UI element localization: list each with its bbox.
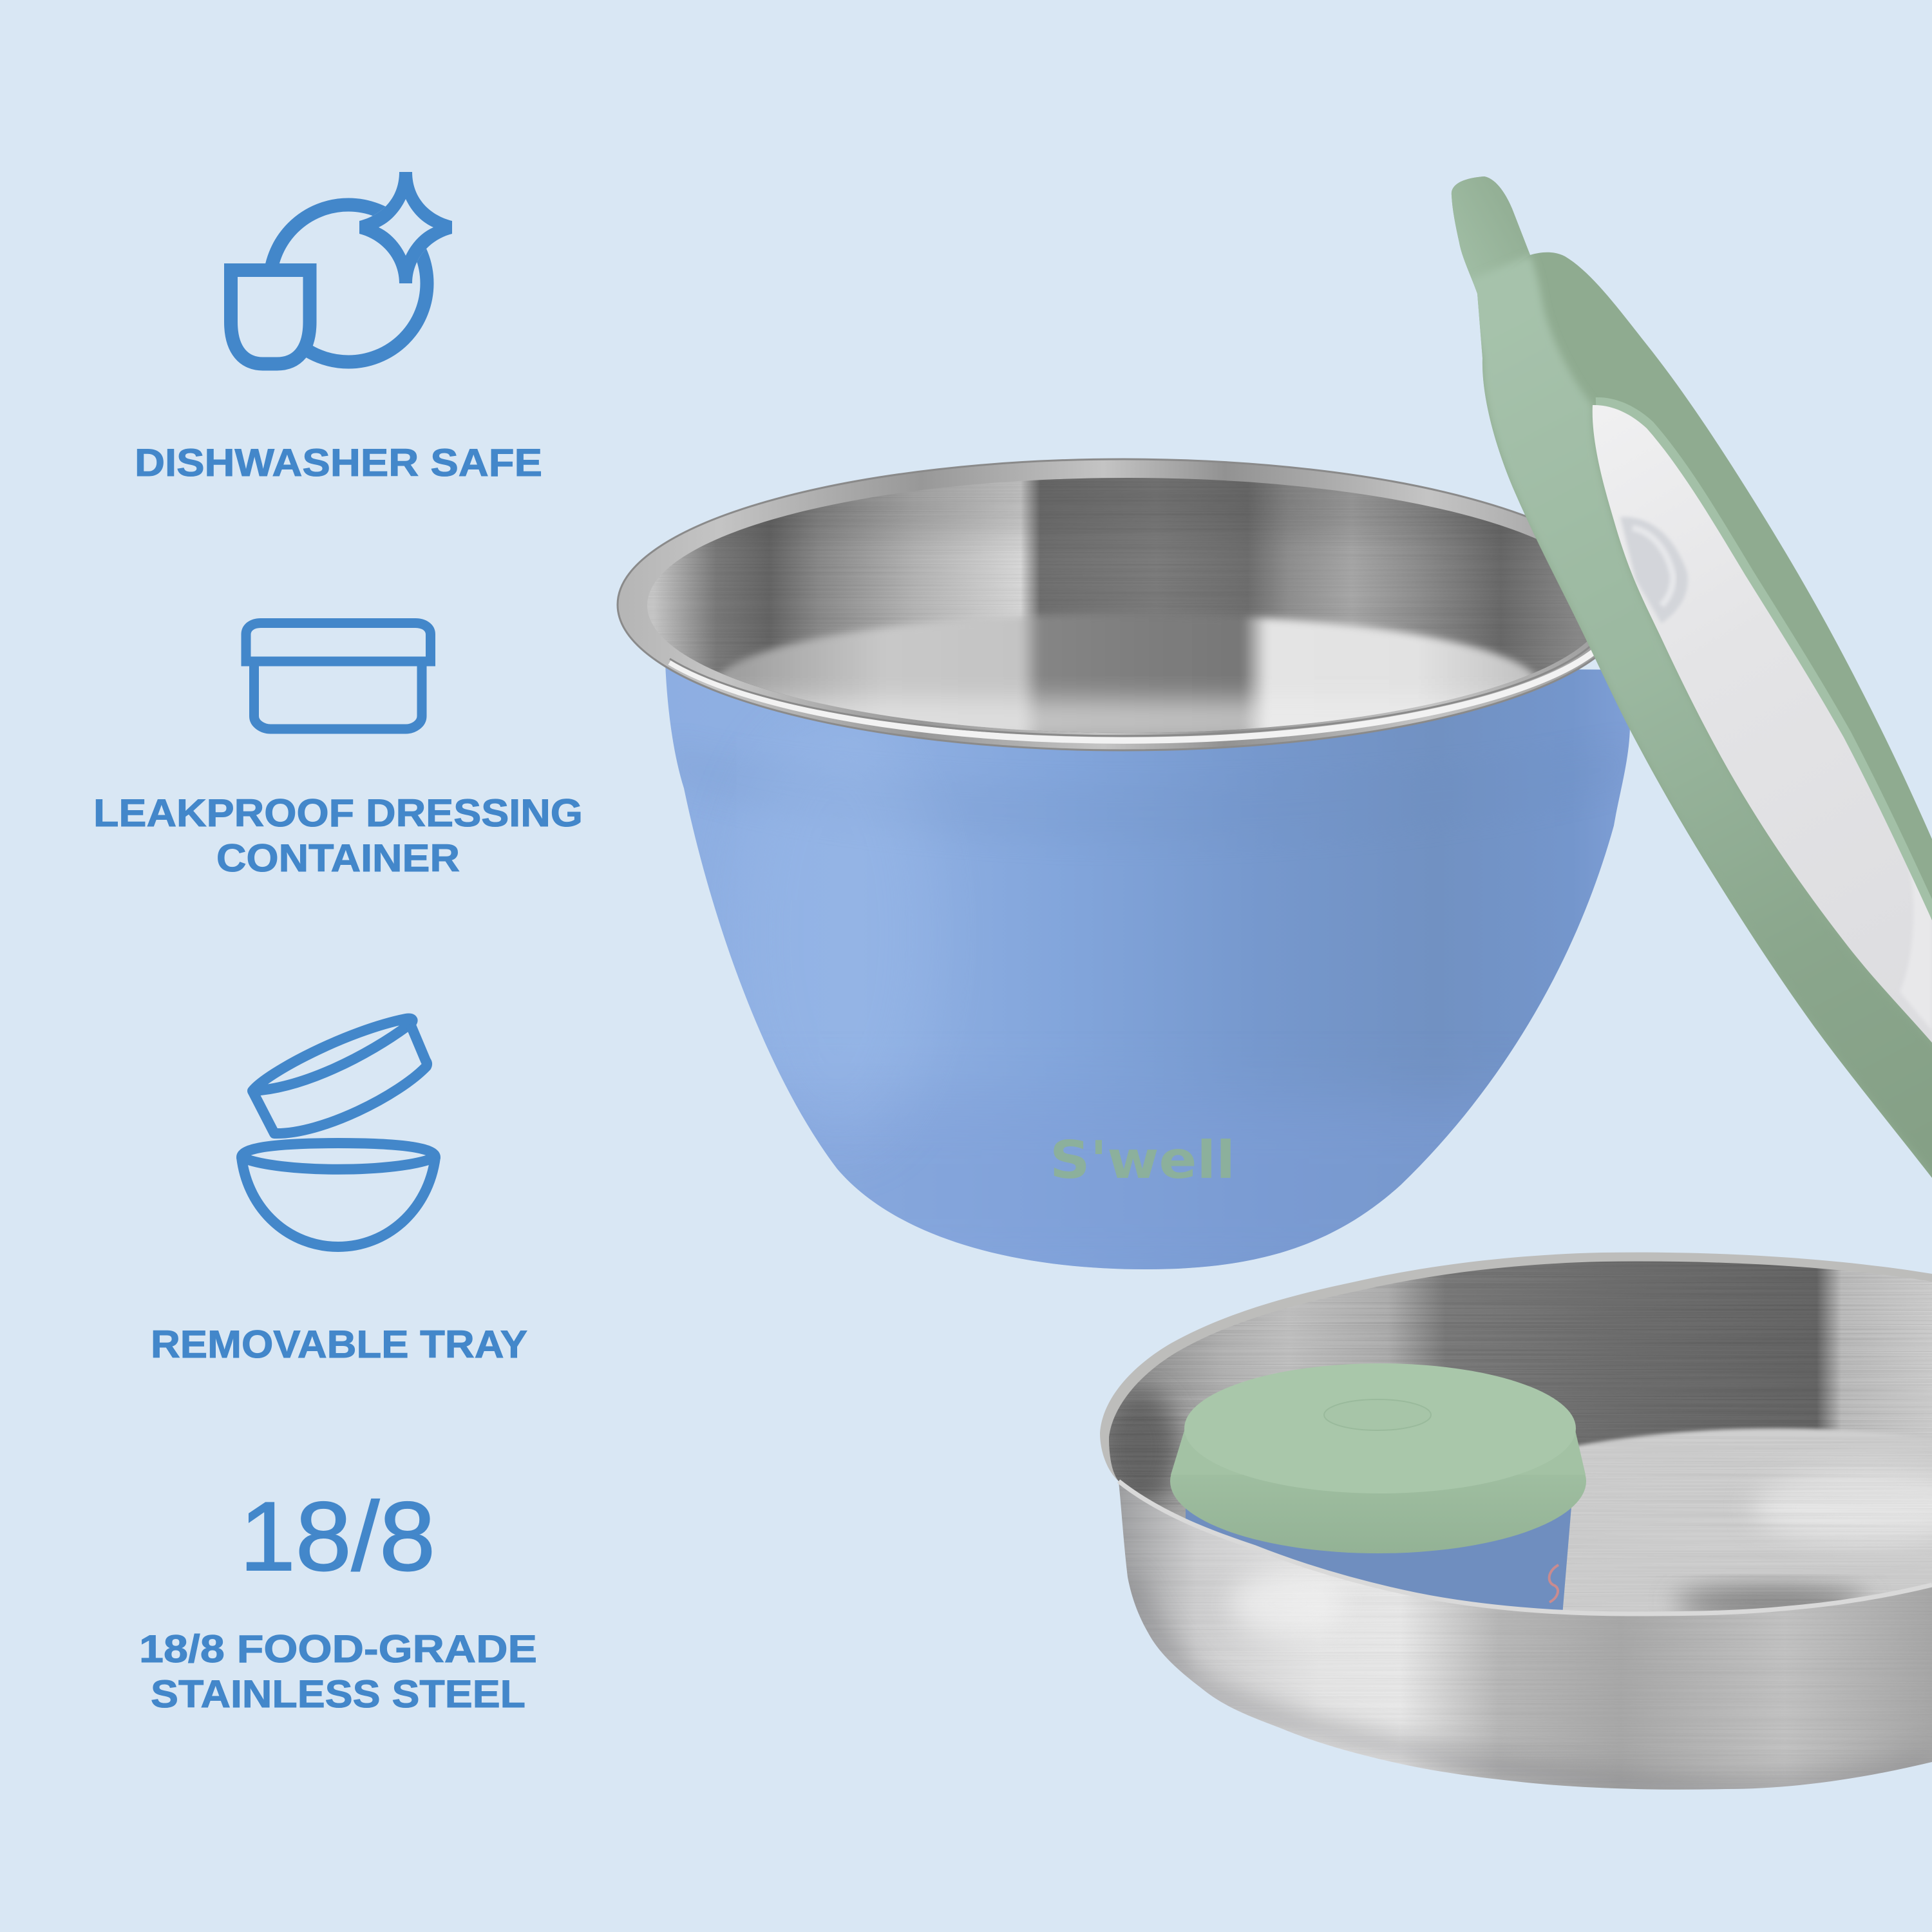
icon: removable tray [242,1018,435,1247]
lid clear window [1593,405,1932,1043]
product: blue salad bowl [618,459,1649,1288]
bowl steel interior [647,478,1587,733]
label: removable tray: REMOVABLE TRAY [151,1323,527,1366]
dressing cup green lid [1170,1363,1586,1553]
tray interior [1109,1261,1932,1611]
label: stainless steel [139,1627,537,1716]
dressing cup pink mark [1549,1565,1558,1602]
lid pull tab [1452,176,1530,294]
icon: dishwasher safe, cup plate and sparkle [231,172,452,364]
lid window knob [1620,517,1932,1030]
label: leakproof dressing container [93,791,583,880]
panel: feature list [93,172,583,1716]
tray rim [1100,1253,1932,1585]
label: leakproof dressing container: CONTAINER [216,837,460,880]
lid window inner edge [1596,402,1932,917]
bowl body [665,667,1630,1269]
lid silicone frame [1452,176,1932,1178]
tray outer wall [1095,1468,1932,1797]
dressing cup lid knob [1324,1399,1431,1430]
product: steel tray with dressing cup [1095,1249,1932,1797]
dressing cup body [1186,1501,1571,1623]
label: stainless steel: 18/8 FOOD-GRADE [139,1627,537,1671]
lid lower band [1462,255,1932,1191]
product: tilted green lid [1452,176,1932,1191]
label: dishwasher safe: DISHWASHER SAFE [135,441,542,484]
tray front rim [1119,1481,1932,1614]
label: stainless steel: STAINLESS STEEL [151,1672,526,1716]
icon: 18/8 numeral: 18/8 [240,1482,435,1591]
bowl rim [618,459,1630,750]
label: leakproof dressing container: LEAKPROOF DRESSING [93,791,583,835]
logo: S'well [1050,1130,1235,1190]
icon: leakproof container [246,623,430,729]
